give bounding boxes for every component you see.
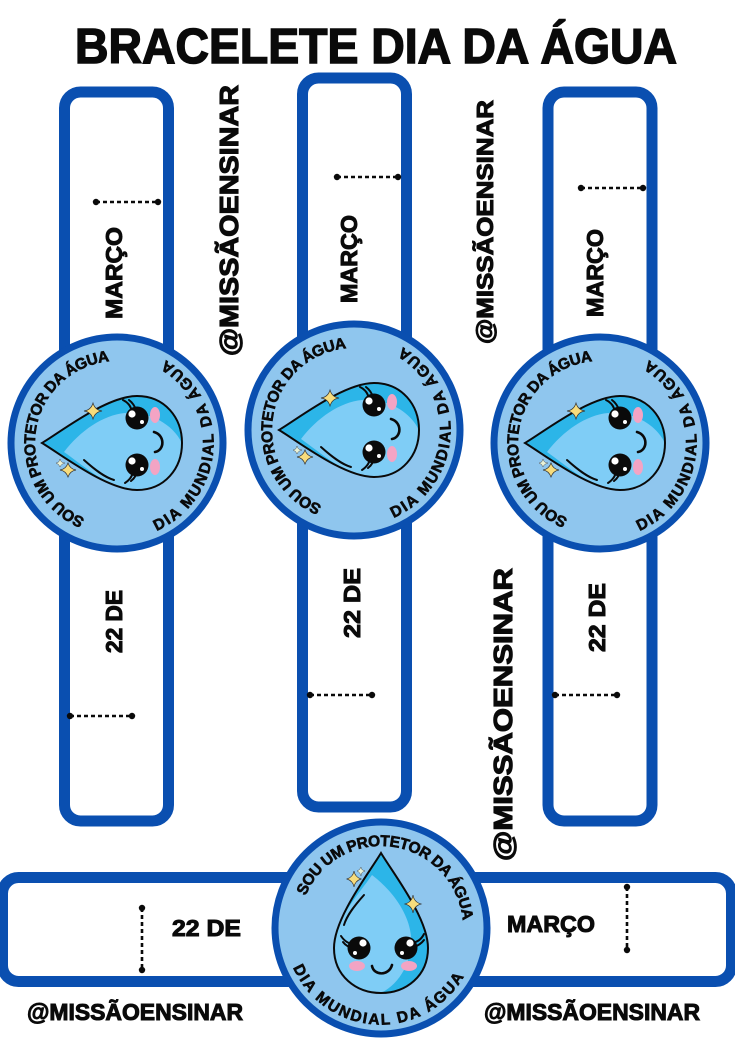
- bracelet strap: right: [548, 92, 652, 821]
- handle: bottom right: @MISSÃOENSINAR: [484, 998, 700, 1025]
- label: 22 de left: 22 DE: [101, 590, 127, 653]
- dotted cut line: middle strap top: [334, 174, 401, 180]
- badge text: protector: SOU UM PROTETOR DA ÁGUA: [260, 338, 347, 514]
- badge text: world day: DIA MUNDIAL DA ÁGUA: [152, 360, 214, 531]
- bracelet strap: bottom horizontal: [2, 878, 732, 982]
- badge: bottom: [272, 818, 490, 1038]
- icon: water drop: [42, 396, 182, 490]
- bracelet strap: middle: [302, 78, 406, 807]
- badge: left: [8, 334, 226, 552]
- handle: vertical lower: @MISSÃOENSINAR: [488, 568, 518, 861]
- handle: bottom left: @MISSÃOENSINAR: [27, 998, 243, 1025]
- dotted cut line: left strap top: [93, 199, 161, 205]
- label: 22 de bottom: 22 DE: [172, 915, 241, 941]
- dotted cut line: right strap top: [578, 185, 646, 191]
- badge text: world day: DIA MUNDIAL DA ÁGUA: [293, 963, 464, 1025]
- label: março left: MARÇO: [101, 227, 127, 319]
- title: BRACELETE DIA DA ÁGUA: [75, 20, 677, 74]
- dotted cut line: bottom strap left: [139, 905, 145, 973]
- handle: vertical left: @MISSÃOENSINAR: [214, 85, 244, 356]
- label: março right: MARÇO: [582, 229, 608, 317]
- handle: vertical right: @MISSÃOENSINAR: [471, 100, 498, 344]
- label: 22 de right: 22 DE: [584, 583, 610, 652]
- label: março middle: MARÇO: [336, 215, 362, 303]
- label: 22 de middle: 22 DE: [339, 568, 365, 638]
- label: março bottom: MARÇO: [507, 911, 595, 937]
- badge text: world day: DIA MUNDIAL DA ÁGUA: [389, 346, 451, 518]
- dotted cut line: left strap bottom: [67, 713, 135, 719]
- badge text: world day: DIA MUNDIAL DA ÁGUA: [635, 360, 697, 531]
- dotted cut line: bottom strap right: [624, 884, 630, 953]
- badge text: protector: SOU UM PROTETOR DA ÁGUA: [506, 350, 593, 527]
- icon: water drop: [525, 396, 665, 490]
- icon: water drop: [334, 853, 428, 993]
- badge: middle: [244, 320, 464, 540]
- badge text: protector: SOU UM PROTETOR DA ÁGUA: [24, 350, 110, 527]
- icon: water drop: [279, 383, 419, 477]
- dotted cut line: middle strap bottom: [307, 692, 375, 698]
- badge text: protector: SOU UM PROTETOR DA ÁGUA: [297, 834, 474, 921]
- badge: right: [490, 334, 710, 552]
- bracelet strap: left: [64, 92, 168, 821]
- dotted cut line: right strap bottom: [552, 692, 620, 698]
